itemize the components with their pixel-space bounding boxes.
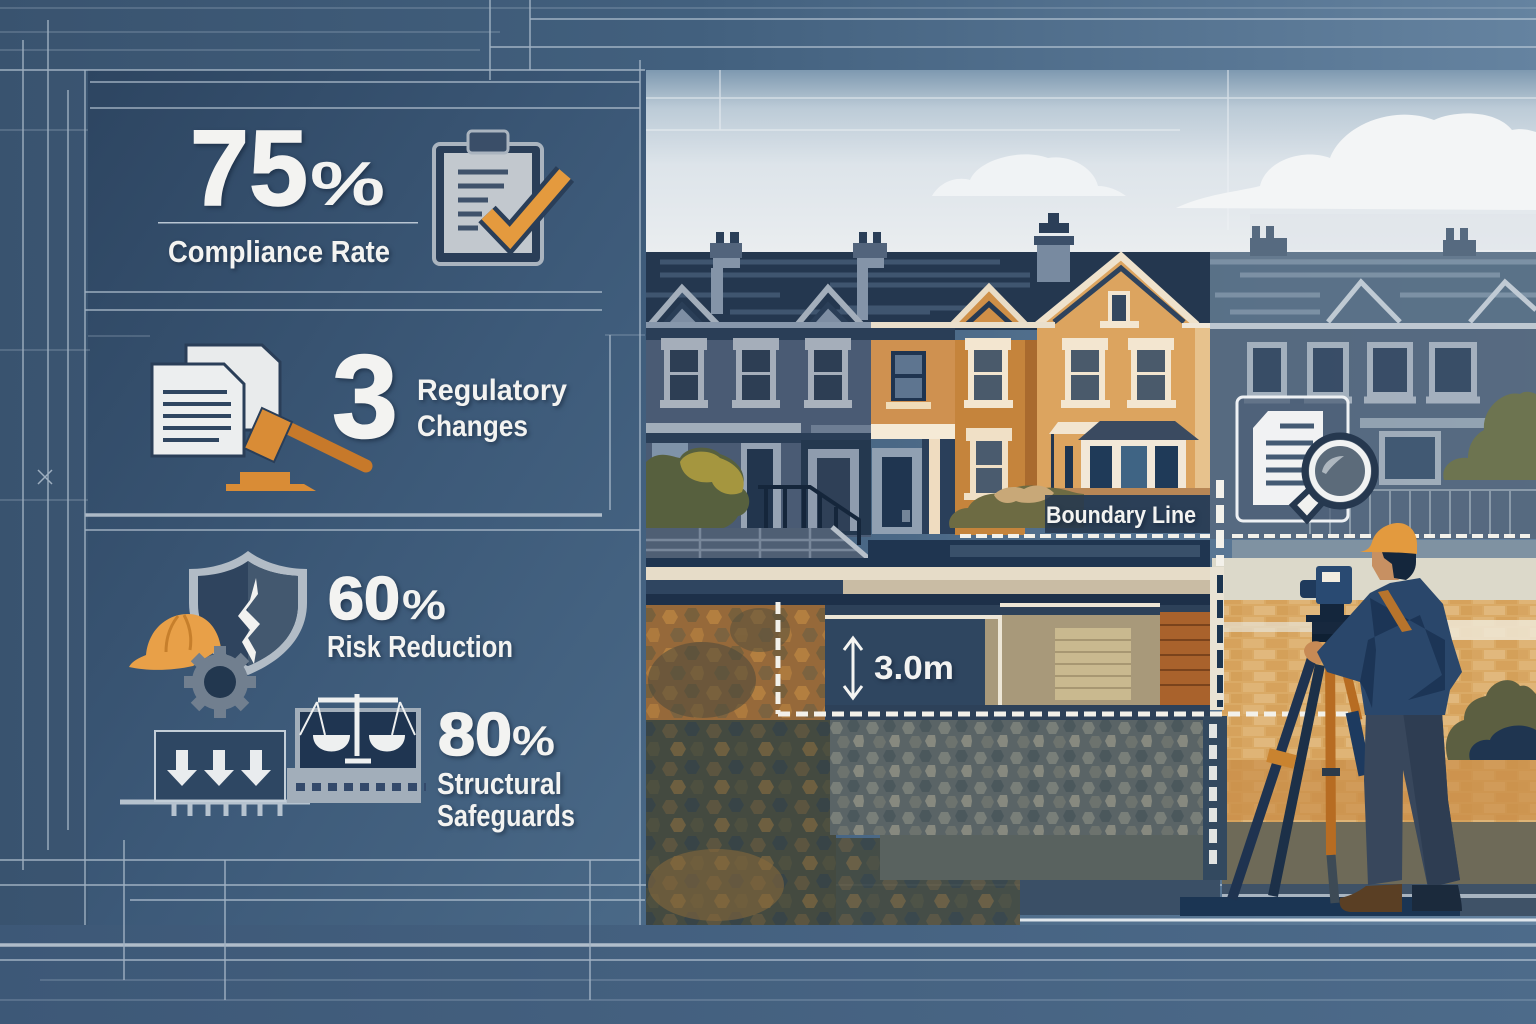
gray lower storey [646, 423, 922, 535]
icon: documents and gavel [152, 345, 366, 491]
eaves [646, 322, 1210, 328]
dashed lines [778, 480, 1530, 867]
boundary label backdrop [1045, 495, 1210, 533]
height arrow [844, 638, 862, 698]
depth label: 3.0m [874, 649, 954, 686]
label: Regulatory [417, 374, 567, 407]
bottom band [0, 925, 1536, 1024]
jacket shading [1360, 598, 1445, 708]
boundary line label: Boundary Line [1046, 502, 1196, 529]
hard hat [1360, 523, 1417, 554]
boots [1340, 884, 1402, 912]
total station [1300, 566, 1358, 642]
bush right lower [1446, 680, 1536, 760]
roof tiles [646, 262, 1030, 312]
cloud left [932, 154, 1126, 196]
stat: structural safeguards [437, 701, 575, 833]
under strip [646, 540, 1536, 567]
hand [1304, 641, 1328, 664]
chimneys [710, 213, 1074, 320]
bay window [1045, 421, 1210, 495]
steps [646, 527, 868, 560]
soil shading [648, 608, 790, 921]
label: Structural [437, 766, 562, 801]
divider [158, 222, 418, 224]
railing [758, 487, 859, 545]
orange walls [871, 253, 1210, 535]
panel: right scene [646, 70, 1536, 925]
icon: arrows box [120, 731, 310, 816]
label: Risk Reduction [327, 629, 513, 664]
left stats panel [88, 70, 646, 925]
right ground [1222, 822, 1536, 916]
cloud right [1176, 113, 1536, 210]
gray windows [660, 338, 852, 408]
icon: scales box [287, 694, 426, 803]
gravel centre [830, 720, 1210, 835]
icon: hard hat [129, 614, 221, 670]
jacket [1317, 578, 1462, 715]
gray wall [646, 327, 871, 537]
stat: risk reduction [327, 565, 513, 664]
stat: regulatory changes [332, 331, 567, 463]
boundary column [1203, 567, 1227, 880]
stat: compliance rate [168, 107, 390, 269]
value 80: 80 [438, 701, 512, 768]
tripod [1232, 640, 1365, 903]
icon: document and magnifier [1237, 397, 1375, 521]
right faded houses [1210, 226, 1536, 539]
icon: shield [189, 551, 307, 675]
value 3: 3 [332, 331, 398, 463]
ground slab [646, 567, 1212, 605]
head [1372, 550, 1412, 580]
surveyor [1232, 523, 1462, 912]
base strip [1180, 897, 1460, 916]
stat: regulatory changes: Changes [417, 410, 528, 443]
bush right upper [1443, 392, 1536, 480]
gables [650, 256, 1197, 326]
label: Compliance Rate [168, 234, 390, 269]
orange house details [871, 291, 1176, 534]
right brick wall [1212, 558, 1536, 822]
percent sign: % [310, 150, 385, 219]
percent sign: % [402, 581, 446, 628]
underground room [825, 605, 1210, 720]
bush centre [949, 486, 1084, 528]
icon: clipboard with check [434, 131, 565, 264]
sling strap [1378, 590, 1412, 632]
roof [646, 252, 1210, 330]
value 75: 75 [190, 107, 308, 228]
bush left [646, 448, 749, 533]
sky [646, 70, 1536, 260]
bottom soil [830, 838, 1020, 925]
stat: structural safeguards: Safeguards [437, 798, 575, 833]
percent sign: % [512, 717, 555, 764]
trousers [1364, 712, 1460, 888]
value 60: 60 [328, 565, 400, 632]
icon: gear [184, 646, 256, 718]
sky lines [646, 70, 1536, 230]
left soil [646, 605, 826, 725]
